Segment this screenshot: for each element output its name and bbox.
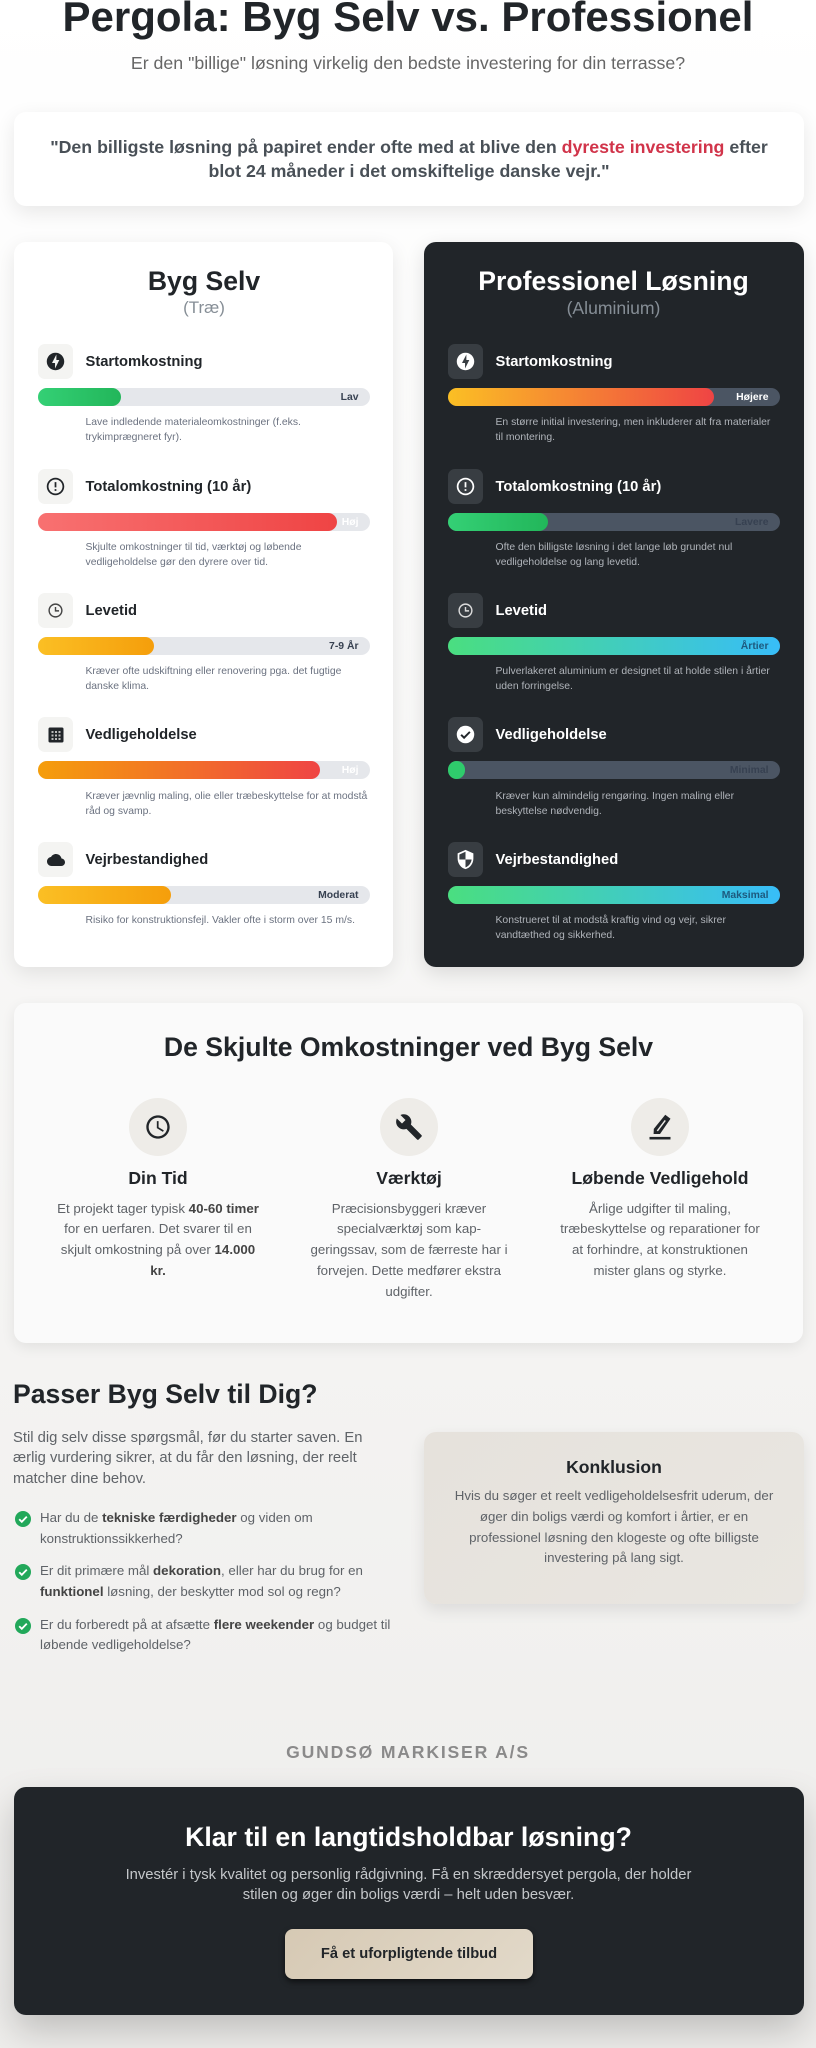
description bbox=[86, 417, 301, 443]
icon: bolt bbox=[38, 344, 73, 379]
icon: grid calendar bbox=[38, 717, 73, 752]
text bbox=[310, 1200, 508, 1299]
text: stilen og øger din boligs værdi – helt uden besvær. bbox=[243, 1887, 574, 1903]
bar: høj bbox=[38, 513, 370, 531]
subtitle: Er den "billige" løsning virkelig den bedste investering for din terrasse? bbox=[131, 53, 685, 73]
text bbox=[455, 1488, 774, 1565]
text: træbeskyttelse og reparationer for bbox=[560, 1221, 760, 1236]
intro paragraph bbox=[13, 1430, 362, 1487]
bar: 7-9 år: 7-9 År bbox=[329, 641, 358, 652]
text: forvejen. Dette medfører ekstra bbox=[317, 1263, 501, 1278]
icon: clock bbox=[128, 1098, 186, 1156]
heading: self-check: Passer Byg Selv til Dig? bbox=[13, 1379, 317, 1409]
bar: højere: Højere bbox=[736, 392, 768, 403]
row: Startomkostning bbox=[448, 344, 780, 443]
description bbox=[496, 542, 732, 568]
label: Vedligeholdelse bbox=[86, 727, 197, 743]
description bbox=[496, 791, 734, 817]
bar: høj bbox=[38, 761, 370, 779]
quote text: "Den billigste løsning på papiret ender ofte med at blive den dyreste investering efter bbox=[50, 136, 768, 156]
text: at forhindre, at konstruktionen bbox=[572, 1242, 748, 1257]
description: Skjulte omkostninger til tid, værktøj og løbende bbox=[86, 542, 302, 553]
description bbox=[496, 914, 726, 941]
bar: høj: Høj bbox=[342, 765, 358, 776]
panel: Professionel Løsning bbox=[424, 242, 804, 967]
text: funktionel løsning, der beskytter mod sol og regn? bbox=[40, 1584, 341, 1599]
heading: Klar til en langtidsholdbar løsning? bbox=[185, 1822, 632, 1852]
description: Kræver kun almindelig rengøring. Ingen maling eller bbox=[496, 791, 734, 802]
description: beskyttelse nødvendig. bbox=[496, 806, 602, 817]
bar: lavere bbox=[448, 513, 780, 531]
bar: minimal bbox=[448, 761, 780, 779]
text: mister glans og styrke. bbox=[593, 1263, 726, 1278]
checklist bbox=[15, 1510, 390, 1652]
intro paragraph: Stil dig selv disse spørgsmål, før du starter saven. En bbox=[13, 1430, 362, 1446]
item 1 bbox=[15, 1510, 313, 1546]
label: Startomkostning bbox=[496, 354, 612, 370]
text: investering på lang sigt. bbox=[544, 1550, 684, 1565]
description: Pulverlakeret aluminium er designet til at holde stilen i årtier bbox=[496, 666, 770, 677]
heading: Værktøj bbox=[376, 1168, 442, 1188]
panel: Byg Selv bbox=[14, 242, 393, 967]
row: Totalomkostning bbox=[448, 469, 780, 568]
button: Få et uforpligtende tilbud bbox=[321, 1946, 497, 1962]
icon: check bbox=[15, 1564, 31, 1580]
panel: call to action bbox=[14, 1787, 804, 2015]
heading: Professionel Løsning: Professionel Løsning bbox=[478, 266, 749, 296]
bar: høj: Høj bbox=[342, 517, 358, 528]
intro paragraph: ærlig vurdering sikrer, at du får den løsning, der reelt bbox=[13, 1450, 357, 1466]
label: Vedligeholdelse bbox=[496, 727, 607, 743]
text bbox=[57, 1200, 259, 1278]
text: Er du forberedt på at afsætte flere weekender og budget til bbox=[40, 1617, 390, 1632]
description bbox=[86, 666, 341, 692]
icon: alert bbox=[38, 469, 73, 504]
heading: Konklusion: Konklusion bbox=[566, 1457, 662, 1477]
quote text: blot 24 måneder i det omskiftelige danske vejr." bbox=[208, 160, 610, 180]
row: Startomkostning bbox=[38, 344, 370, 443]
description: Risiko for konstruktionsfejl. Vakler ofte i storm over 15 m/s. bbox=[86, 915, 355, 926]
item 3 bbox=[15, 1617, 390, 1652]
icon: alert bbox=[448, 469, 483, 504]
text: øger din boligs værdi og komfort i årtier, er en bbox=[480, 1509, 748, 1524]
text: Årlige udgifter til maling, bbox=[589, 1200, 731, 1216]
icon: wrench bbox=[380, 1098, 438, 1156]
panel: conclusion bbox=[424, 1432, 804, 1604]
bar: maksimal bbox=[448, 886, 780, 904]
description bbox=[86, 542, 302, 568]
panel: quote callout bbox=[14, 112, 804, 206]
text: Investér i tysk kvalitet og personlig rådgivning. Få en skræddersyet pergola, der holder bbox=[126, 1866, 691, 1882]
text bbox=[40, 1563, 363, 1599]
description: uden forringelse. bbox=[496, 681, 573, 692]
intro paragraph: matcher dine behov. bbox=[13, 1471, 146, 1487]
text bbox=[560, 1200, 760, 1278]
text: geringssav, som de færreste har i bbox=[310, 1242, 508, 1257]
subheading: Træ: (Træ) bbox=[183, 298, 225, 317]
icon: cloud bbox=[38, 842, 73, 877]
label: Vejrbestandighed bbox=[496, 852, 618, 868]
description: danske klima. bbox=[86, 681, 149, 692]
text: professionel løsning den klogeste og ofte billigste bbox=[469, 1530, 759, 1545]
text: kr. bbox=[150, 1263, 166, 1278]
label: Startomkostning bbox=[86, 354, 202, 370]
text: udgifter. bbox=[385, 1284, 433, 1299]
label: Levetid bbox=[86, 603, 137, 619]
icon: bolt bbox=[448, 344, 483, 379]
bar: moderat: Moderat bbox=[318, 890, 358, 901]
bar: 7-9 år bbox=[38, 637, 370, 655]
row: Totalomkostning bbox=[38, 469, 370, 568]
column: Løbende Vedligehold bbox=[560, 1098, 760, 1278]
heading: Byg Selv: Byg Selv bbox=[148, 266, 260, 296]
heading: Din Tid bbox=[128, 1168, 188, 1188]
row: Levetid bbox=[38, 593, 370, 692]
description bbox=[496, 417, 770, 443]
bar: lavere: Lavere bbox=[735, 517, 768, 528]
text: løbende vedligeholdelse? bbox=[40, 1637, 191, 1652]
brand name: GUNDSØ MARKISER A/S bbox=[286, 1742, 530, 1762]
bar: lav: Lav bbox=[341, 392, 358, 403]
text bbox=[40, 1617, 390, 1652]
row: Levetid bbox=[448, 593, 780, 692]
label: Vejrbestandighed bbox=[86, 852, 208, 868]
description bbox=[86, 790, 368, 817]
column: Værktøj bbox=[310, 1098, 508, 1299]
bar: minimal: Minimal bbox=[730, 765, 768, 776]
text bbox=[40, 1510, 313, 1546]
bar: maksimal: Maksimal bbox=[722, 890, 768, 901]
icon: shield bbox=[448, 842, 483, 877]
text: Præcisionsbyggeri kræver bbox=[332, 1200, 486, 1216]
text: for en uerfaren. Det svarer til en bbox=[64, 1221, 252, 1236]
text: Er dit primære mål dekoration, eller har du brug for en bbox=[40, 1563, 363, 1578]
text: Hvis du søger et reelt vedligeholdelsesfrit uderum, der bbox=[455, 1488, 773, 1503]
icon: clock bbox=[38, 593, 73, 628]
description: vandtæthed og sikkerhed. bbox=[496, 930, 615, 941]
bar: årtier bbox=[448, 637, 780, 655]
text: specialværktøj som kap- bbox=[337, 1221, 481, 1236]
text: Har du de tekniske færdigheder og viden om bbox=[40, 1510, 313, 1525]
row: Vejrbestandighed bbox=[448, 842, 780, 941]
description bbox=[496, 666, 770, 692]
heading: Løbende Vedligehold bbox=[572, 1168, 748, 1188]
icon: check circle bbox=[448, 717, 483, 752]
subheading: Aluminium: (Aluminium) bbox=[567, 298, 660, 318]
bar: lav bbox=[38, 388, 370, 406]
row: Vejrbestandighed bbox=[38, 842, 370, 926]
bar: moderat bbox=[38, 886, 370, 904]
icon: marker bbox=[630, 1098, 688, 1156]
description: Lave indledende materialeomkostninger (f.eks. bbox=[86, 417, 301, 428]
description: vedligeholdelse gør den dyrere over tid. bbox=[86, 557, 268, 568]
description: til montering. bbox=[496, 432, 555, 443]
description: råd og svamp. bbox=[86, 806, 151, 817]
description: trykimprægneret fyr). bbox=[86, 432, 182, 443]
column: Din Tid bbox=[57, 1098, 259, 1278]
description: En større initial investering, men inkluderer alt fra materialer bbox=[496, 417, 770, 428]
row: Vedligeholdelse bbox=[38, 717, 370, 817]
quote text bbox=[50, 136, 768, 180]
bar: årtier: Årtier bbox=[741, 641, 768, 652]
description: Kræver ofte udskiftning eller renovering pga. det fugtige bbox=[86, 666, 341, 677]
text: Et projekt tager typisk 40-60 timer bbox=[57, 1200, 259, 1216]
description: Konstrueret til at modstå kraftig vind og vejr, sikrer bbox=[496, 915, 726, 926]
text: konstruktionssikkerhed? bbox=[40, 1531, 183, 1546]
bar: højere bbox=[448, 388, 780, 406]
icon: check bbox=[15, 1511, 31, 1527]
label: Totalomkostning (10 år) bbox=[496, 479, 661, 495]
text: skjult omkostning på over 14.000 bbox=[61, 1242, 255, 1257]
item 2 bbox=[15, 1563, 363, 1599]
panel: hidden costs bbox=[14, 1003, 803, 1343]
label: Levetid bbox=[496, 603, 547, 619]
label: Totalomkostning (10 år) bbox=[86, 479, 251, 495]
icon: check bbox=[15, 1618, 31, 1634]
button bbox=[285, 1929, 533, 1979]
description: Kræver jævnlig maling, olie eller træbeskyttelse for at modstå bbox=[86, 791, 367, 802]
text bbox=[126, 1866, 692, 1903]
description: vedligeholdelse og lang levetid. bbox=[496, 557, 640, 568]
heading: hidden costs: De Skjulte Omkostninger ved Byg Selv bbox=[164, 1032, 653, 1062]
icon: clock bbox=[448, 593, 483, 628]
row: Vedligeholdelse bbox=[448, 717, 780, 817]
description: Ofte den billigste løsning i det lange løb grundet nul bbox=[496, 542, 732, 553]
